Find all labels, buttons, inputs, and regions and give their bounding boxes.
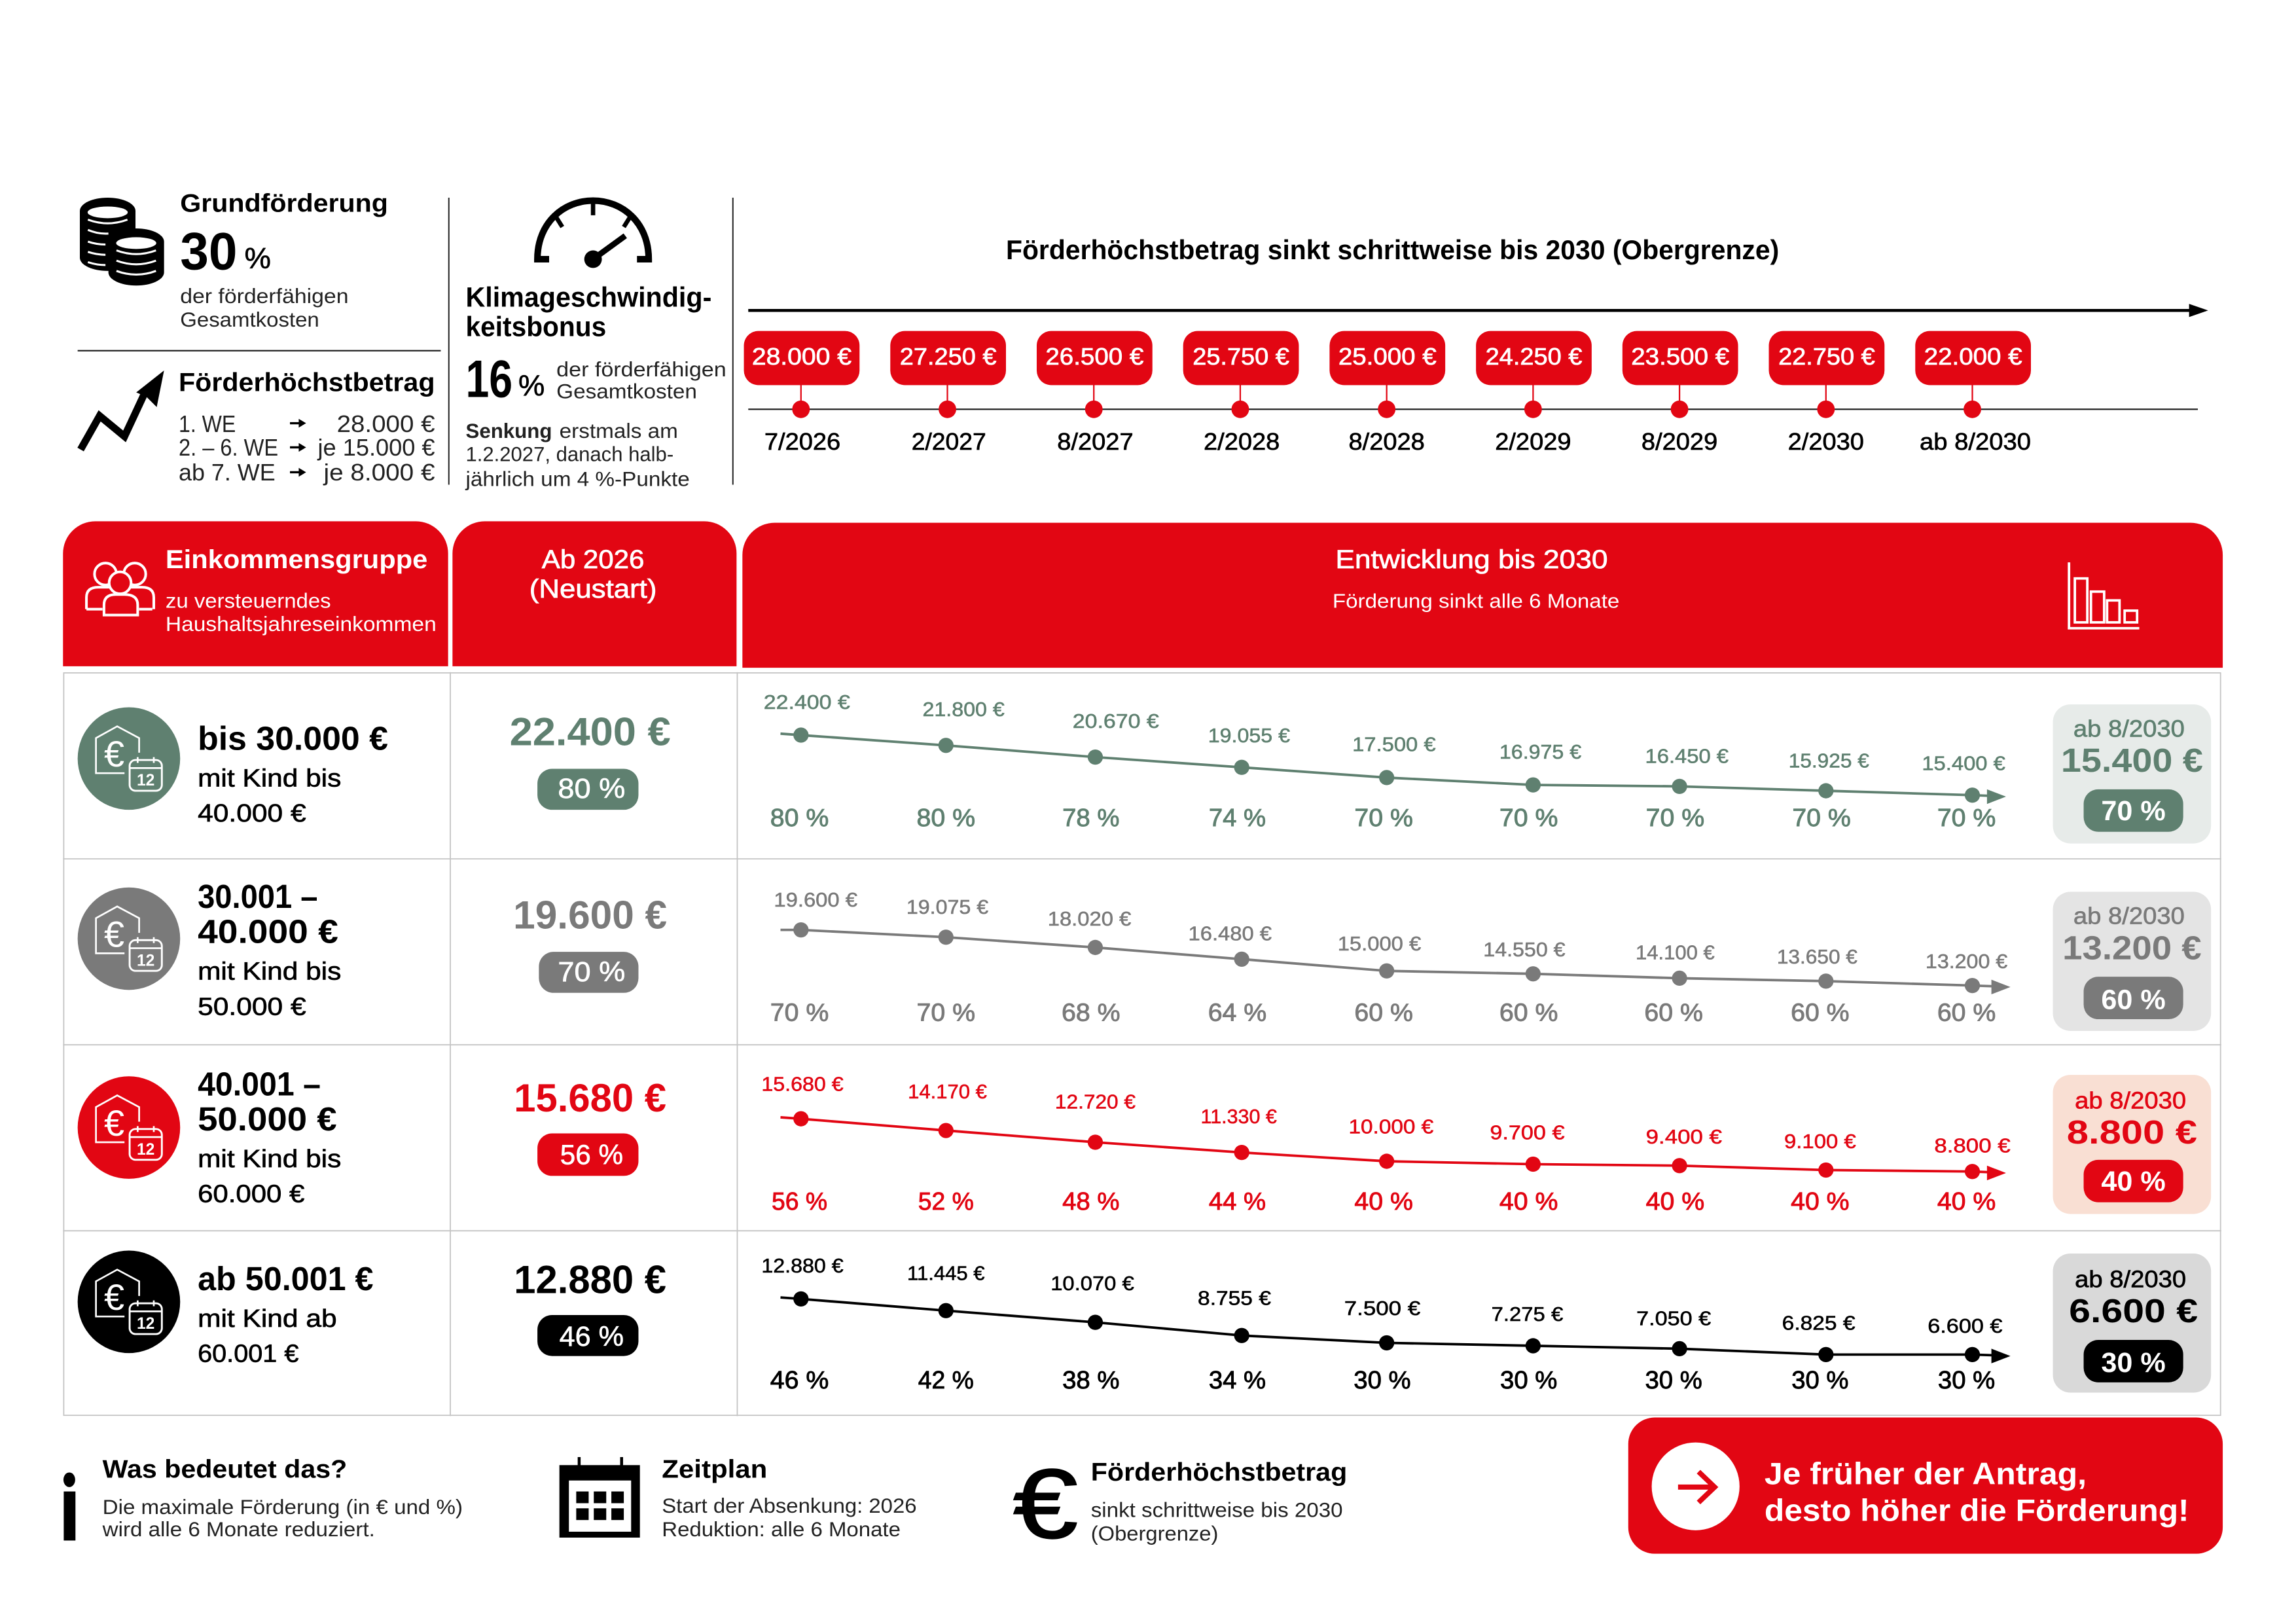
callout: ab 8/2030 15.400 € <box>2053 704 2211 844</box>
chart: development line, group 2: 60 % <box>1644 999 1703 1026</box>
chart: development line, group 4: 11.445 € <box>907 1263 985 1284</box>
value: 12.880 € 46 %: 46 % <box>560 1322 624 1352</box>
chart: development line, group 4: 10.070 € <box>1050 1273 1134 1295</box>
callout: ab 8/2030 13.200 €: 60 % <box>2101 984 2166 1015</box>
text: income group 2: mit Kind bis <box>198 958 341 986</box>
chart: development line, group 1: 20.670 € <box>1073 711 1159 732</box>
text: schedule: Reduktion: alle 6 Monate <box>662 1518 901 1541</box>
chart: development line, group 4: 34 % <box>1209 1367 1266 1394</box>
text: sinkt schrittweise: sinkt schrittweise bis 2030 <box>1091 1499 1343 1522</box>
icon: speedometer <box>537 200 649 268</box>
text: income group 2 <box>198 877 341 1020</box>
chart: development line, group 1 <box>764 692 2006 832</box>
text: call to action: Je früher der Antrag, <box>1765 1456 2087 1490</box>
icon: rising zigzag arrow <box>81 370 164 450</box>
value: 19.600 € 70 % <box>513 892 667 993</box>
chart: development line, group 2: 70 % <box>770 999 829 1026</box>
chart: development line, group 1: 17.500 € <box>1352 734 1436 756</box>
heading: Ab 2026 (Neustart): (Neustart) <box>529 574 656 604</box>
chart: development line, group 3: 40 % <box>1937 1188 1996 1216</box>
chart: development line, group 3: 12.720 € <box>1055 1092 1136 1113</box>
row: bis 30.000 € <box>78 692 2211 844</box>
callout: ab 8/2030 8.800 € <box>2053 1075 2211 1214</box>
icon: house euro calendar, green <box>78 708 180 810</box>
text: income group 4: ab 50.001 € <box>198 1259 374 1297</box>
text: Senkung: erstmals am <box>560 420 678 442</box>
value: 30 %: % <box>245 242 271 274</box>
value: 30 %: 30 <box>180 223 237 281</box>
chart: development line, group 4: 7.275 € <box>1492 1304 1563 1326</box>
text: Haushaltsjahreseinkommen <box>166 589 437 636</box>
chart: development line, group 1: 70 % <box>1354 804 1413 832</box>
text: explanation: Die maximale Förderung (in € und %) <box>103 1496 463 1519</box>
chart: development line, group 3: 15.680 € <box>761 1074 844 1096</box>
chart: development line, group 2 <box>770 890 2011 1026</box>
callout: ab 8/2030 13.200 €: ab 8/2030 <box>2073 903 2185 929</box>
callout: ab 8/2030 6.600 €: 6.600 € <box>2069 1291 2198 1329</box>
panel: table header Ab 2026 <box>452 521 736 666</box>
text: sinkt schrittweise <box>1091 1499 1343 1545</box>
text: income group 4: 60.001 € <box>198 1341 298 1368</box>
panel: Grundförderung <box>80 189 388 331</box>
list: amounts per unit: 28.000 € <box>337 411 435 437</box>
chart: development line, group 2: 60 % <box>1937 999 1996 1026</box>
panel: Förderhöchstbetrag staffel <box>81 367 435 486</box>
chart: development line, group 3: 10.000 € <box>1348 1117 1433 1138</box>
text: sinkt schrittweise: (Obergrenze) <box>1091 1522 1218 1545</box>
timeline amount pills: 26.500 € <box>1045 344 1143 370</box>
chart: development line, group 4: 42 % <box>918 1367 974 1394</box>
chart: development line, group 4: 30 % <box>1645 1367 1702 1394</box>
callout: ab 8/2030 8.800 €: 8.800 € <box>2067 1113 2197 1151</box>
list: amounts per unit: 1. WE <box>179 411 236 437</box>
heading: Förderhöchstbetrag: Förderhöchstbetrag <box>1091 1458 1347 1487</box>
chart: development line, group 1: 16.450 € <box>1645 746 1729 768</box>
chart: development line, group 4: 8.755 € <box>1198 1288 1271 1309</box>
list: amounts per unit: 2. – 6. WE <box>179 435 278 461</box>
chart: development line, group 2: 18.020 € <box>1048 909 1131 930</box>
text: income group 4: mit Kind ab <box>198 1305 337 1333</box>
timeline date labels <box>764 429 2031 455</box>
timeline amount pills: 25.000 € <box>1338 344 1437 370</box>
chart: development line, group 1: 21.800 € <box>922 699 1005 721</box>
text: Senkung: 1.2.2027, danach halb- <box>465 443 673 466</box>
text: der förderfähigen Gesamtkosten: Gesamtkosten <box>180 308 319 331</box>
text: income group 4 <box>198 1259 374 1368</box>
text: income group 2: 50.000 € <box>198 993 306 1020</box>
footer: Zeitplan <box>560 1455 917 1541</box>
text: Haushaltsjahreseinkommen: zu versteuerndes <box>166 589 331 612</box>
chart: development line, group 4: 6.825 € <box>1782 1312 1856 1334</box>
text: Senkung: jährlich um 4 %-Punkte <box>465 468 690 491</box>
value: 15.680 € 56 %: 15.680 € <box>514 1075 666 1120</box>
text: income group 2: 40.000 € <box>198 912 338 950</box>
chart: development line, group 2: 14.550 € <box>1483 939 1566 961</box>
heading: Förderhöchstbetrag: Förderhöchstbetrag <box>179 367 435 397</box>
chart: development line, group 4: 6.600 € <box>1928 1316 2003 1337</box>
text: income group 3: 40.001 – <box>198 1064 321 1102</box>
icon: house euro calendar, grey <box>78 888 180 990</box>
chart: development line, group 1: 22.400 € <box>764 692 850 713</box>
chart: development line, group 2: 14.100 € <box>1636 942 1715 964</box>
timeline date labels: 7/2026 <box>764 429 840 455</box>
icon: people group <box>86 563 154 615</box>
chart: development line, group 2: 16.480 € <box>1189 923 1272 945</box>
list: amounts per unit: ab 7. WE <box>179 460 276 486</box>
timeline amount pills: 27.250 € <box>900 344 997 370</box>
chart: development line, group 2: 70 % <box>917 999 975 1026</box>
text: income group 1 <box>198 719 388 827</box>
icon: info i <box>63 1472 75 1540</box>
heading: Einkommensgruppe: Einkommensgruppe <box>166 545 427 574</box>
value: 22.400 € 80 %: 22.400 € <box>510 710 671 754</box>
heading: timeline title: Förderhöchstbetrag sinkt schrittweise bis 2030 (Obergrenze) <box>1006 235 1779 265</box>
chart: development line, group 2: 13.650 € <box>1777 947 1857 968</box>
timeline amount pills: 22.750 € <box>1778 344 1875 370</box>
footer: Förderhöchstbetrag <box>1013 1449 1347 1559</box>
value: 19.600 € 70 %: 70 % <box>558 957 625 988</box>
chart: development line, group 1: 78 % <box>1062 804 1119 832</box>
chart: development line, group 1: 74 % <box>1209 804 1266 832</box>
chart: development line, group 1: 70 % <box>1499 804 1558 832</box>
chart: development line, group 3: 48 % <box>1062 1188 1119 1216</box>
callout: ab 8/2030 8.800 €: ab 8/2030 <box>2075 1088 2186 1114</box>
chart: development line, group 1: 15.925 € <box>1789 750 1869 772</box>
text: der förderfähigen Gesamtkosten: der förderfähigen <box>556 358 726 381</box>
arrow: timeline direction <box>748 304 2208 317</box>
chart: development line, group 3: 52 % <box>918 1188 974 1216</box>
chart: development line, group 4: 7.050 € <box>1636 1308 1711 1330</box>
timeline date labels: ab 8/2030 <box>1920 429 2031 455</box>
value: 30 % <box>180 223 271 281</box>
timeline amount pills <box>744 331 2031 385</box>
icon: arrow in circle <box>1652 1443 1740 1530</box>
icon: euro sign: € <box>1013 1449 1078 1559</box>
list: amounts per unit <box>179 411 435 486</box>
chart: development line, group 4: 30 % <box>1354 1367 1411 1394</box>
icon: house euro calendar, green: 12 <box>137 772 154 789</box>
text: call to action <box>1765 1456 2189 1527</box>
chart: development line, group 1: 80 % <box>770 804 829 832</box>
chart: development line, group 3: 9.700 € <box>1490 1123 1565 1144</box>
icon: house euro calendar, grey: € <box>104 913 124 954</box>
chart: development line, group 2: 15.000 € <box>1338 933 1421 955</box>
value: 12.880 € 46 %: 12.880 € <box>514 1257 666 1301</box>
footer: Was bedeutet das? <box>63 1455 463 1541</box>
text: income group 3: 50.000 € <box>198 1100 337 1138</box>
chart: development line, group 2: 60 % <box>1354 999 1413 1026</box>
chart: development line, group 2: 19.075 € <box>906 897 988 918</box>
timeline date labels: 2/2030 <box>1788 429 1864 455</box>
chart: development line, group 3: 40 % <box>1646 1188 1704 1216</box>
icon: house euro calendar, red <box>78 1076 180 1179</box>
row: 40.001 – 50.000 € <box>78 1064 2211 1216</box>
value: 15.680 € 56 % <box>514 1075 666 1176</box>
text: income group 3: mit Kind bis <box>198 1146 341 1173</box>
timeline stems and dots <box>792 384 1981 418</box>
chart: development line, group 3: 40 % <box>1791 1188 1850 1216</box>
value: 19.600 € 70 %: 19.600 € <box>513 892 667 937</box>
chart: development line, group 2: 68 % <box>1062 999 1120 1026</box>
icon: coin stacks <box>80 198 164 285</box>
text: der förderfähigen Gesamtkosten: Gesamtkosten <box>556 380 697 403</box>
timeline date labels: 2/2028 <box>1204 429 1280 455</box>
panel: table header Entwicklung bis 2030 <box>742 523 2223 668</box>
panel: table header Einkommensgruppe <box>63 521 448 666</box>
callout: ab 8/2030 15.400 €: 15.400 € <box>2061 741 2203 779</box>
chart: development line, group 3: 40 % <box>1354 1188 1413 1216</box>
chart: development line, group 4: 7.500 € <box>1344 1298 1420 1320</box>
value: 12.880 € 46 % <box>514 1257 666 1356</box>
row: 30.001 – 40.000 € <box>78 877 2211 1031</box>
chart: development line, group 3: 9.100 € <box>1784 1131 1856 1153</box>
text: Senkung <box>465 420 690 491</box>
callout: ab 8/2030 15.400 €: 70 % <box>2101 796 2166 827</box>
chart: development line, group 3: 14.170 € <box>908 1081 987 1103</box>
text: income group 2: 30.001 – <box>198 877 318 915</box>
panel: Klimageschwindigkeitsbonus <box>465 200 726 491</box>
text: explanation <box>102 1496 463 1541</box>
timeline amount pills: 23.500 € <box>1631 344 1729 370</box>
heading: Klimageschwindigkeitsbonus <box>465 283 711 342</box>
chart: development line, group 3: 40 % <box>1499 1188 1558 1216</box>
text: schedule: Start der Absenkung: 2026 <box>662 1494 917 1517</box>
text: income group 1: bis 30.000 € <box>198 719 388 757</box>
icon: declining bar chart <box>2069 562 2140 628</box>
chart: development line, group 3: 44 % <box>1209 1188 1266 1216</box>
chart: development line, group 3: 56 % <box>772 1188 827 1216</box>
timeline amount pills: 22.000 € <box>1924 344 2022 370</box>
chart: development line, group 1: 70 % <box>1646 804 1704 832</box>
panel: timeline Förderhöchstbetrag <box>744 235 2208 455</box>
chart: development line, group 2: 19.600 € <box>774 890 857 911</box>
timeline amount pills: 24.250 € <box>1486 344 1582 370</box>
chart: development line, group 3: 9.400 € <box>1646 1127 1722 1148</box>
list: amounts per unit: je 8.000 € <box>323 460 435 486</box>
value: 15.680 € 56 %: 56 % <box>560 1140 623 1171</box>
text: income group 3 <box>198 1064 341 1208</box>
timeline amount pills: 28.000 € <box>752 344 852 370</box>
chart: development line, group 3 <box>761 1074 2011 1216</box>
text: der förderfähigen Gesamtkosten <box>556 358 726 403</box>
callout: Je früher der Antrag <box>1628 1418 2223 1554</box>
icon: house euro calendar, red: € <box>104 1102 124 1144</box>
icon: house euro calendar, grey: 12 <box>137 952 154 969</box>
text: schedule <box>662 1494 917 1541</box>
value: 22.400 € 80 %: 80 % <box>558 774 625 804</box>
heading: Klimageschwindigkeitsbonus: keitsbonus <box>465 312 606 342</box>
table grid <box>63 672 2221 1416</box>
chart: development line, group 1: 16.975 € <box>1499 742 1581 763</box>
callout: ab 8/2030 6.600 €: ab 8/2030 <box>2075 1266 2186 1292</box>
text: der förderfähigen Gesamtkosten: der förderfähigen <box>180 285 349 308</box>
text: income group 3: 60.000 € <box>198 1181 304 1208</box>
chart: development line, group 4: 30 % <box>1938 1367 1995 1394</box>
chart: development line, group 1: 15.400 € <box>1922 753 2005 775</box>
callout: ab 8/2030 13.200 € <box>2053 892 2211 1031</box>
value: 16 %: % <box>518 369 545 402</box>
callout: ab 8/2030 6.600 €: 30 % <box>2101 1348 2166 1379</box>
chart: development line, group 4: 30 % <box>1791 1367 1848 1394</box>
text: income group 1: 40.000 € <box>198 800 306 827</box>
heading: Entwicklung bis 2030: Entwicklung bis 2030 <box>1335 545 1607 574</box>
heading: Was bedeutet das?: Was bedeutet das? <box>103 1455 347 1483</box>
value: 22.400 € 80 % <box>510 710 671 810</box>
timeline date labels: 8/2028 <box>1348 429 1425 455</box>
callout: ab 8/2030 6.600 € <box>2053 1254 2211 1393</box>
chart: development line, group 2: 60 % <box>1499 999 1558 1026</box>
timeline date labels: 2/2029 <box>1495 429 1571 455</box>
text: Förderung sinkt alle 6 Monate: Förderung sinkt alle 6 Monate <box>1333 590 1619 612</box>
chart: development line, group 4: 30 % <box>1500 1367 1557 1394</box>
text: call to action: desto höher die Förderung! <box>1765 1492 2189 1527</box>
icon: house euro calendar, green: € <box>104 733 124 774</box>
chart: development line, group 1: 19.055 € <box>1208 725 1290 747</box>
chart: development line, group 4: 12.880 € <box>761 1255 844 1277</box>
icon: calendar <box>560 1457 640 1538</box>
text: explanation: wird alle 6 Monate reduziert. <box>102 1518 375 1541</box>
icon: house euro calendar, black: € <box>104 1276 124 1318</box>
icon: house euro calendar, black: 12 <box>137 1315 154 1333</box>
timeline date labels: 2/2027 <box>912 429 986 455</box>
list: amounts per unit: je 15.000 € <box>317 435 435 461</box>
heading: Zeitplan: Zeitplan <box>662 1455 767 1483</box>
callout: ab 8/2030 13.200 €: 13.200 € <box>2062 928 2202 966</box>
chart: development line, group 3: 8.800 € <box>1934 1136 2011 1157</box>
chart: development line, group 1: 80 % <box>917 804 975 832</box>
chart: development line, group 4: 46 % <box>770 1367 829 1394</box>
chart: development line, group 3: 11.330 € <box>1201 1106 1277 1128</box>
text: Haushaltsjahreseinkommen: Haushaltsjahreseinkommen <box>166 613 437 636</box>
icon: house euro calendar, black <box>78 1251 180 1353</box>
icon: house euro calendar, red: 12 <box>137 1141 154 1159</box>
timeline date labels: 8/2029 <box>1641 429 1717 455</box>
heading: Ab 2026 (Neustart): Ab 2026 <box>542 545 644 574</box>
callout: ab 8/2030 15.400 €: ab 8/2030 <box>2073 715 2185 742</box>
chart: development line, group 2: 13.200 € <box>1926 951 2007 973</box>
heading: Klimageschwindigkeitsbonus: Klimageschwindig- <box>465 283 711 314</box>
heading: Grundförderung: Grundförderung <box>180 189 388 217</box>
row: ab 50.001 € <box>78 1251 2211 1394</box>
chart: development line, group 4: 38 % <box>1062 1367 1119 1394</box>
text: Senkung: Senkung <box>465 420 552 442</box>
heading: Ab 2026 (Neustart) <box>529 545 656 604</box>
chart: development line, group 4 <box>761 1255 2011 1394</box>
callout: ab 8/2030 8.800 €: 40 % <box>2101 1166 2166 1197</box>
text: income group 1: mit Kind bis <box>198 765 341 792</box>
chart: development line, group 2: 60 % <box>1791 999 1850 1026</box>
timeline amount pills: 25.750 € <box>1193 344 1289 370</box>
value: 16 %: 16 <box>465 350 512 408</box>
chart: development line, group 1: 70 % <box>1792 804 1851 832</box>
text: der förderfähigen Gesamtkosten <box>180 285 349 331</box>
chart: development line, group 1: 70 % <box>1937 804 1996 832</box>
chart: development line, group 2: 64 % <box>1208 999 1266 1026</box>
timeline date labels: 8/2027 <box>1057 429 1134 455</box>
